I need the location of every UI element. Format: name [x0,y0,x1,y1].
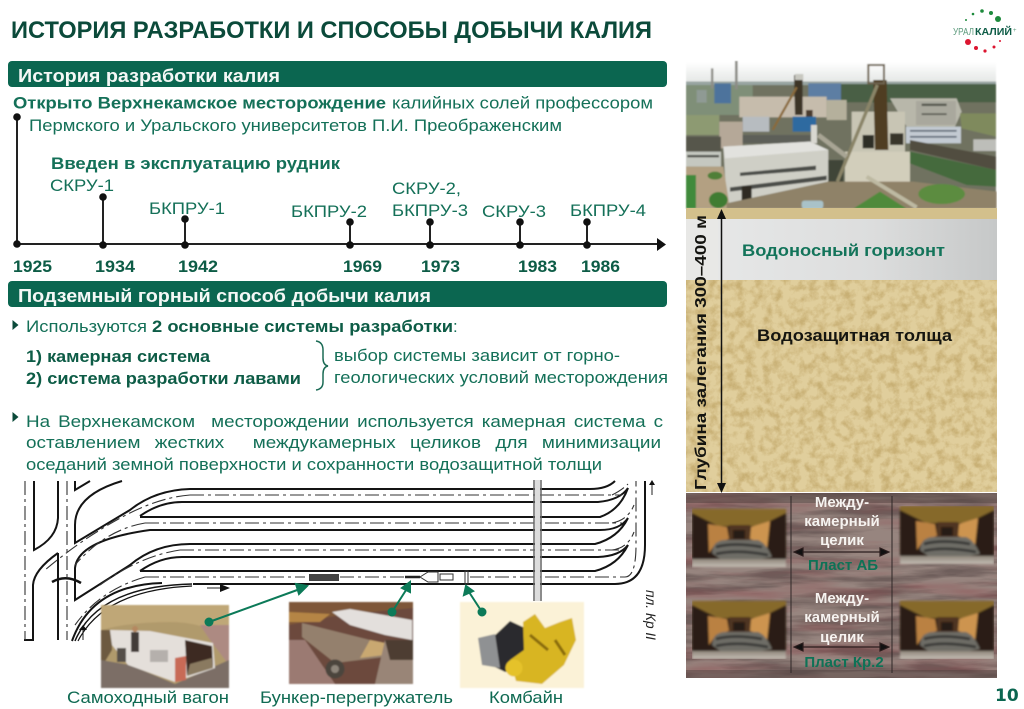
brace [316,341,328,390]
equipment captions [67,688,563,707]
mine plan diagram [24,480,655,641]
discovery text [13,94,653,135]
equipment captions: Бункер-перегружатель [260,688,453,707]
equipment captions: Комбайн [489,688,563,707]
system choice note [334,346,668,387]
depth arrow and label [693,209,726,493]
timeline chart: 1942 [178,257,218,276]
bullet: two systems: Используются [26,317,147,336]
timeline chart: 1983 [518,257,557,276]
section header: history [8,61,667,87]
photo: bunker loader [289,602,413,684]
timeline chart: 1986 [581,257,620,276]
timeline chart: БКПРУ-2 [291,202,367,221]
pillar labels [804,494,880,646]
title: ИСТОРИЯ РАЗРАБОТКИ И СПОСОБЫ ДОБЫЧИ КАЛИЯ [11,17,652,44]
centre plant [852,112,905,155]
pillar labels: камерный [804,609,880,626]
depth arrow and label: Глубина залегания 300–400 м [693,215,710,490]
logo: + [1013,28,1017,34]
photo: mine surface complex [686,61,997,209]
page number: 10 [995,686,1019,706]
list of systems: 2) система разработки лавами [26,369,301,388]
timeline chart: 1934 [95,257,136,276]
headframe left [794,75,803,115]
logo: КАЛИЙ [975,25,1012,38]
timeline chart: СКРУ-2, [392,179,461,198]
list of systems: 1) камерная система [26,347,211,366]
main building [723,142,828,203]
bed labels: Пласт Кр.2 [804,654,884,671]
bullet: chamber system paragraph: оседаний земной поверхности и сохранности водозащитной толщи [26,455,602,474]
layer: rock with chambers [686,493,997,678]
timeline chart: БКПРУ-1 [149,199,225,218]
logo: УРАЛ [953,27,974,38]
system choice note: выбор системы зависит от горно- [334,346,620,365]
pillar labels: камерный [804,513,880,530]
bullet: chamber system paragraph: оставлением жестких междукамерных целиков для минимизации [26,433,661,452]
bed labels: Пласт АБ [808,557,878,574]
system choice note: геологических условий месторождения [334,368,668,387]
timeline chart: БКПРУ-3 [392,201,468,220]
bed labels [804,557,884,671]
discovery text: калийных солей профессором [392,94,653,112]
discovery text: Открыто Верхнекамское месторождение [13,94,386,112]
timeline chart: СКРУ-3 [482,202,546,221]
ground [686,167,730,208]
pillar arrows [794,548,889,651]
bullet: two systems: : [453,317,458,336]
section header: underground mining: Подземный горный способ добычи калия [18,285,431,306]
pillar labels: Между- [815,590,869,607]
bullet: two systems: 2 основные системы разработки [152,317,453,336]
equipment captions: Самоходный вагон [67,688,229,707]
layer: aquifer [686,219,997,280]
bullet: chamber system paragraph: На Верхнекамском месторождении используется камерная система с [26,412,663,431]
layer: aquifer: Водоносный горизонт [742,241,945,260]
photo: combine [460,602,584,688]
bullet: chamber system paragraph [12,412,663,474]
timeline chart: 1973 [421,257,460,276]
timeline chart: Введен в эксплуатацию рудник [51,154,341,173]
pillar labels: целик [820,629,864,646]
list of systems [26,347,301,388]
discovery text: Пермского и Уральского университетов П.И. Преображенским [29,116,562,135]
timeline chart: БКПРУ-4 [570,201,646,220]
pillar labels: Между- [815,494,869,511]
chamber photos [692,506,994,659]
bullet: two systems [12,317,458,336]
logo [953,9,1017,53]
layer: protective strata [686,280,997,492]
layer: protective strata: Водозащитная толща [757,326,953,345]
photo: self-propelled wagon [101,605,229,688]
timeline chart [13,113,666,276]
callout arrows [206,582,486,626]
layer: topsoil band [686,208,997,220]
timeline chart: СКРУ-1 [50,176,114,195]
bed label: пл. Кр II [643,590,659,640]
section header: history: История разработки калия [18,65,280,86]
pillar labels: целик [820,532,864,549]
section header: underground mining [8,281,667,307]
timeline chart: 1925 [13,257,52,276]
timeline chart: 1969 [343,257,382,276]
